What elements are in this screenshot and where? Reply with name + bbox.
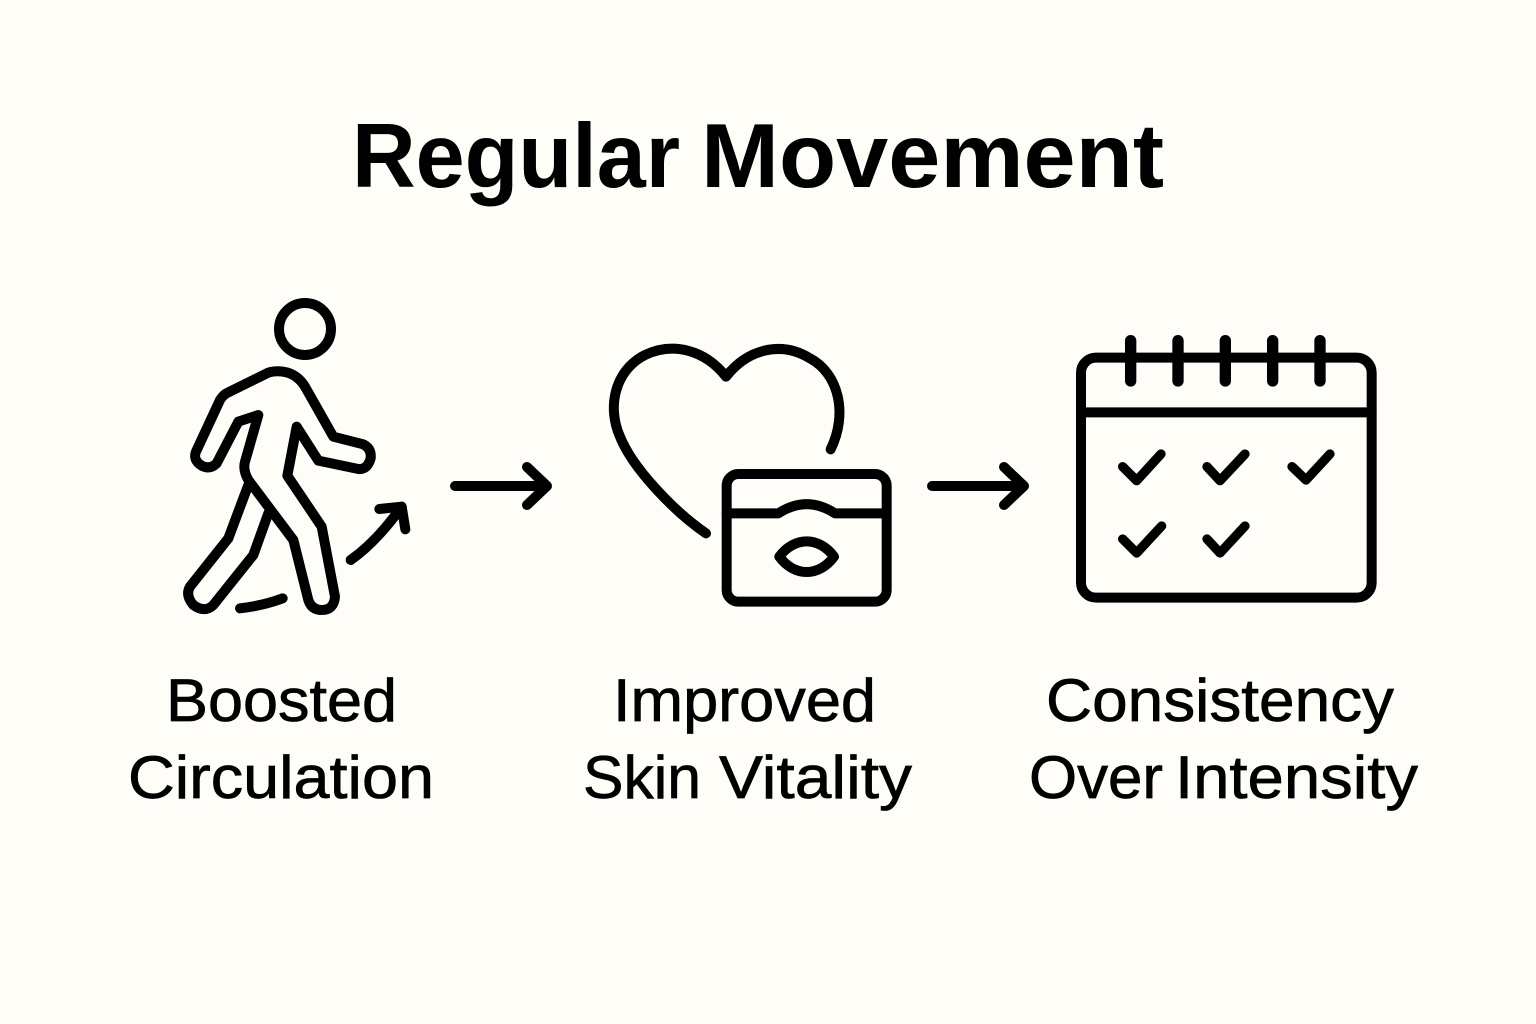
arrow: first to second step (455, 467, 547, 505)
label: improved skin vitality (583, 667, 912, 811)
title: Regular (352, 106, 680, 207)
title: Movement (701, 106, 1164, 207)
icon: walking person with upward arrow (188, 303, 405, 610)
panel: boosted circulation (128, 303, 434, 811)
label: boosted circulation: Boosted (166, 667, 397, 734)
label: improved skin vitality: Skin (583, 744, 701, 811)
title (352, 106, 1164, 207)
icon: heart with skincare jar (614, 349, 887, 602)
label: consistency over intensity: Over (1029, 744, 1163, 811)
label: consistency over intensity (1029, 667, 1418, 811)
label: boosted circulation: Circulation (128, 744, 434, 811)
label: consistency over intensity: Consistency (1046, 667, 1394, 734)
label: consistency over intensity: Intensity (1175, 744, 1418, 811)
label: boosted circulation (128, 667, 434, 811)
panel: consistency over intensity (1029, 341, 1418, 811)
label: improved skin vitality: Improved (613, 667, 876, 734)
panel: improved skin vitality (583, 349, 912, 811)
arrow: second to third step (932, 467, 1024, 505)
icon: calendar with check marks (1081, 341, 1372, 598)
label: improved skin vitality: Vitality (719, 744, 912, 811)
